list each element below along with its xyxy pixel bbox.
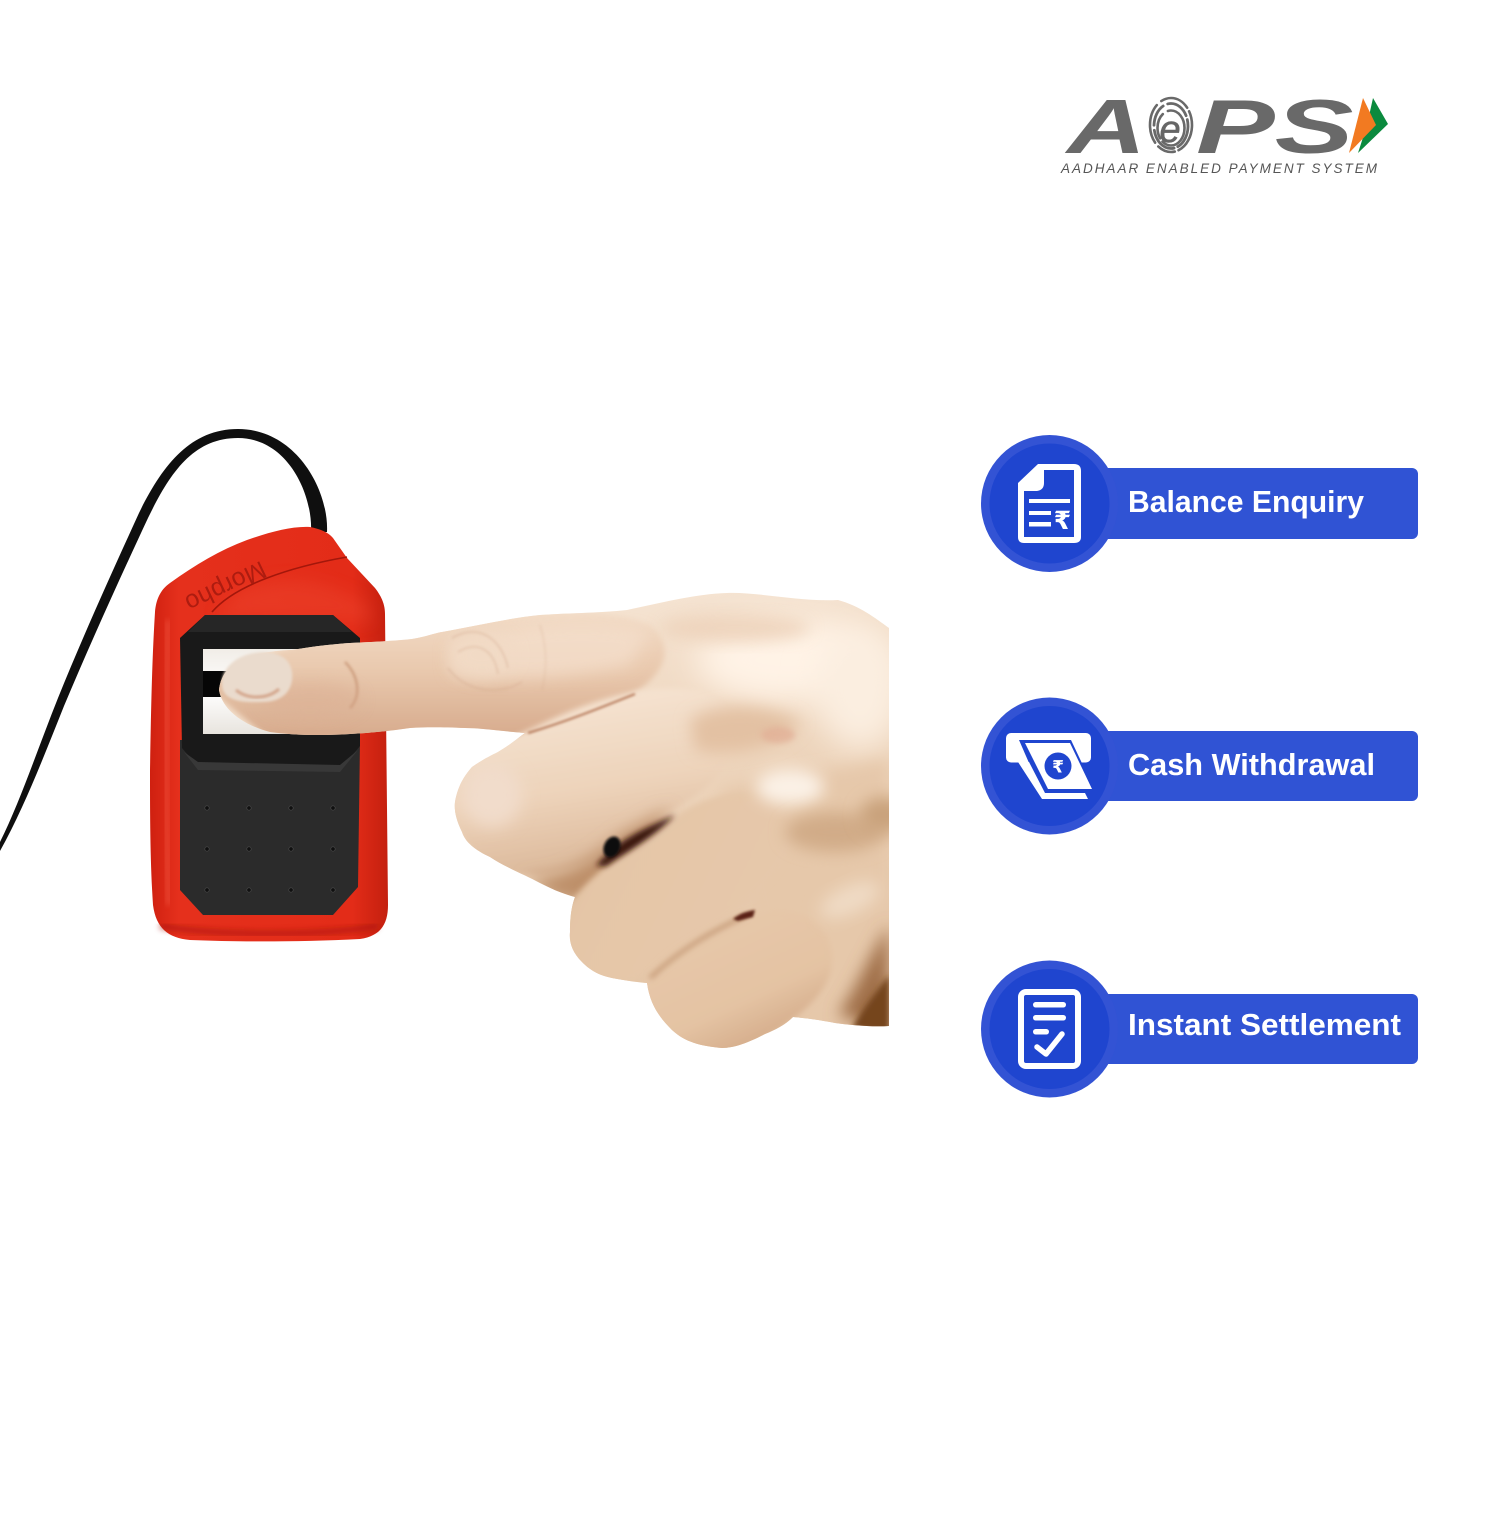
- body highlights: [160, 580, 378, 934]
- logo: AePS: [1060, 84, 1388, 176]
- upper knuckle tone: [660, 614, 810, 642]
- logo tagline: AADHAAR ENABLED PAYMENT SYSTEM: [1060, 161, 1378, 176]
- red device body: [150, 527, 388, 941]
- hand shading: [210, 612, 908, 1056]
- hand knuckle shadow: [785, 812, 885, 852]
- icon circle: [981, 435, 1118, 572]
- hand pressing scanner: [210, 593, 908, 1056]
- icon: checklist: [1021, 992, 1078, 1066]
- dark gap between fingers: [596, 815, 675, 866]
- index finger top sheen: [450, 625, 650, 678]
- service: Balance Enquiry: [981, 435, 1418, 572]
- middle finger: [454, 690, 692, 877]
- logo arrow mark: [1349, 98, 1388, 153]
- body seam line: [212, 557, 347, 612]
- label text: Balance Enquiry: [1128, 484, 1365, 519]
- bottom right dark shadow: [838, 925, 889, 1032]
- black upper frame: [180, 615, 360, 770]
- ring finger: [570, 798, 728, 982]
- crease under index finger: [528, 694, 635, 733]
- knuckle wrinkles: [450, 631, 514, 679]
- scanner window: [203, 649, 313, 734]
- dark crease spot: [733, 910, 755, 921]
- middle finger underside shadow: [525, 808, 670, 905]
- icon: cash from ATM slot: [1006, 733, 1097, 799]
- label bar: [1090, 731, 1418, 801]
- logo letter e: e: [1160, 109, 1181, 151]
- hand base: [219, 593, 889, 1048]
- index finger: [210, 612, 665, 740]
- brand text: Morpho: [181, 555, 270, 617]
- icon: cash from ATM slot: ₹: [1052, 758, 1064, 778]
- icon: document with rupee: ₹: [1054, 506, 1071, 535]
- middle fingertip tint: [464, 774, 521, 830]
- logo fingerprint rings: [1150, 98, 1192, 152]
- label bar: [1090, 994, 1418, 1064]
- label text: Cash Withdrawal: [1128, 747, 1375, 782]
- scanner black bar: [203, 671, 227, 697]
- icon: document with rupee: [1018, 464, 1081, 543]
- device cable: [0, 429, 327, 851]
- logo letters PS: PS: [1196, 85, 1353, 169]
- logo letter A: A: [1065, 84, 1146, 170]
- joint crease near nail: [345, 662, 357, 708]
- frame top band: [188, 615, 352, 632]
- infographic canvas: [0, 96, 1418, 1098]
- frame lip: [184, 750, 358, 772]
- black lower pad: [180, 740, 360, 915]
- service: Cash Withdrawal: [981, 698, 1418, 834]
- small finger: [643, 966, 828, 1048]
- pad dots: [205, 806, 335, 892]
- icon circle: [981, 960, 1118, 1098]
- icon circle: [981, 698, 1118, 834]
- back of hand highlight: [695, 618, 885, 702]
- label bar: [1090, 468, 1418, 539]
- darkest gap spot: [602, 834, 622, 859]
- highlight on ring knuckle: [820, 879, 880, 921]
- fingerprint scanner device: [150, 527, 388, 941]
- label text: Instant Settlement: [1128, 1007, 1401, 1042]
- fingernail: [222, 652, 292, 702]
- crease between ring and small finger: [650, 916, 745, 978]
- service: Instant Settlement: [981, 960, 1418, 1098]
- knuckle tone above middle finger: [690, 707, 800, 753]
- white highlight: [756, 769, 824, 805]
- lower hand tone: [738, 760, 888, 1026]
